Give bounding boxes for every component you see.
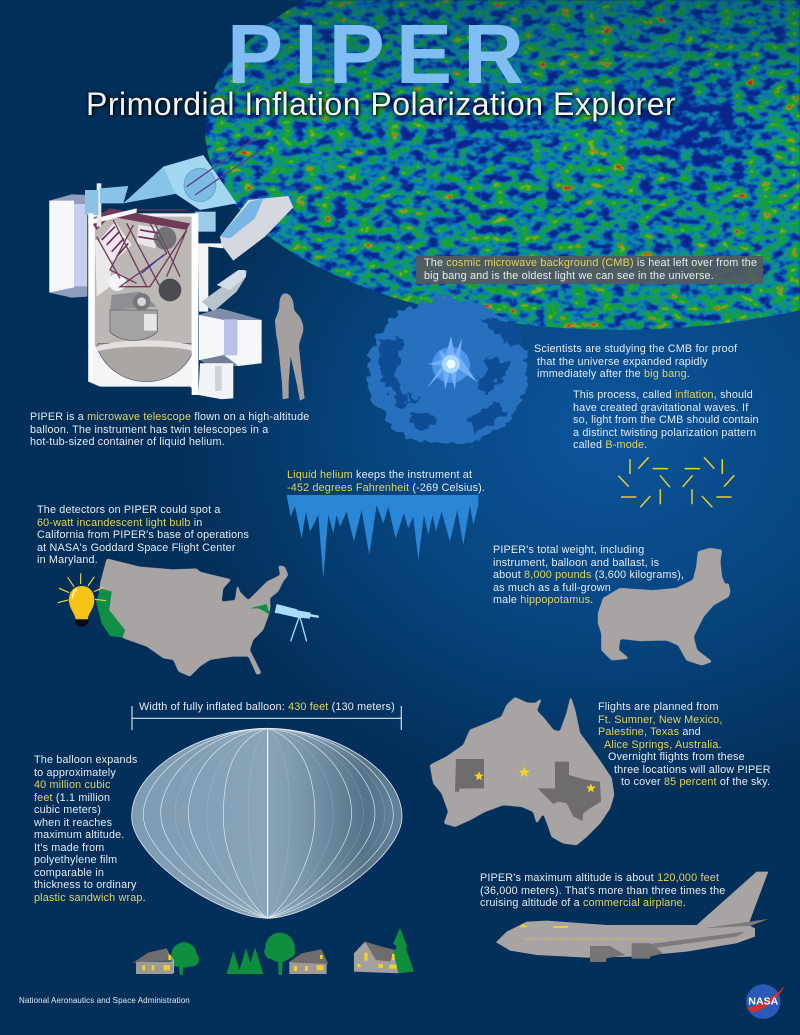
inflation burst [368,298,528,446]
NASA logo: NASA [748,996,778,1007]
subtitle: Primordial Inflation Polarization Explorer [86,86,676,122]
text: CMB definition [424,257,757,282]
text: detectors: at NASA's Goddard Space Flight Center [37,542,236,554]
text: PIPER description: PIPER is a microwave telescope flown on a high-altitude [30,411,309,423]
text: flights: Ft. Sumner, New Mexico, [598,714,723,726]
text: liquid helium: Liquid helium keeps the instrument at [287,469,472,481]
text: balloon volume: The balloon expands [34,754,137,766]
text: altitude: (36,000 meters). That's more than three times the [480,885,725,897]
footer: National Aeronautics and Space Administration [19,996,190,1005]
text: PIPER description: hot-tub-sized container of liquid helium. [30,436,225,448]
text: inflation: This process, called inflation, should [573,389,753,401]
text: liquid helium [287,469,485,494]
text: CMB definition: big bang and is the oldest light we can see in the universe. [424,270,714,282]
Maryland [250,604,270,615]
text: balloon volume: to approximately [34,767,116,779]
text: flights: Overnight flights from these [608,751,745,763]
text: weight: about 8,000 pounds (3,600 kilograms), [493,569,684,581]
text: flights: Flights are planned from [598,701,719,713]
text: inflation: so, light from the CMB should contain [573,414,759,426]
text: balloon volume: It's made from [34,842,104,854]
text: altitude [480,872,725,909]
text: flights [598,701,771,788]
Texas [538,762,601,821]
text: flights: three locations will allow PIPER [614,764,771,776]
title: PIPER [227,7,535,101]
text: balloon volume: 40 million cubic [34,779,111,791]
airplane [496,872,768,962]
California [96,588,125,638]
text: scientists [534,343,738,380]
text: flights: Palestine, Texas and [598,726,701,738]
text: balloon volume: thickness to ordinary [34,879,137,891]
houses and trees [132,928,414,975]
text: balloon volume: comparable in [34,867,104,879]
text: balloon volume: plastic sandwich wrap. [34,892,146,904]
text: inflation [573,389,759,451]
text: balloon volume: polyethylene film [34,854,117,866]
Australia map with state overlays [430,697,614,845]
person silhouette [275,293,305,401]
text: PIPER description: balloon. The instrument has twin telescopes in a [30,424,268,436]
text: detectors: The detectors on PIPER could spot a [37,504,221,516]
text: flights: to cover 85 percent of the sky. [621,776,770,788]
text: balloon volume: cubic meters) [34,804,101,816]
text: balloon width: Width of fully inflated balloon: 430 feet (130 meters) [139,701,395,713]
text: weight: as much as a full-grown [493,582,611,594]
text: altitude: PIPER's maximum altitude is about 120,000 feet [480,872,719,884]
text: detectors: in Maryland. [37,554,98,566]
balloon [132,728,402,918]
text: detectors [37,504,249,566]
text: CMB definition: The cosmic microwave background (CMB) is heat left over from the [424,257,757,269]
text: inflation: called B-mode. [573,439,647,451]
text: balloon volume: maximum altitude. [34,829,124,841]
CMB caption box [416,256,763,284]
hippopotamus [598,548,730,665]
text: balloon volume: when it reaches [34,817,112,829]
text: inflation: a distinct twisting polarization pattern [573,427,756,439]
text: PIPER description [30,411,309,448]
text: flights: Alice Springs, Australia. [604,739,722,751]
text: weight: instrument, balloon and ballast, is [493,557,659,569]
icicles [287,495,478,578]
text: balloon volume: feet (1.1 million [34,792,110,804]
text: scientists: Scientists are studying the CMB for proof [534,343,737,355]
light bulb [58,573,106,627]
New Mexico [455,759,484,792]
NASA logo [746,984,785,1019]
text: balloon volume [34,754,146,904]
CMB sphere map [205,0,800,332]
text: detectors: California from PIPER's base of operations [37,529,249,541]
PIPER instrument [49,137,293,399]
text: altitude: cruising altitude of a commercial airplane. [480,897,686,909]
text: weight [493,544,684,606]
text: inflation: have created gravitational waves. If [573,402,748,414]
small telescope [275,604,319,641]
text: liquid helium: -452 degrees Fahrenheit (-269 Celsius). [287,482,485,494]
USA map [96,558,288,677]
text: detectors: 60-watt incandescent light bulb in [37,517,202,529]
text: weight: male hippopotamus. [493,594,593,606]
balloon width bracket [132,706,401,730]
text: weight: PIPER's total weight, including [493,544,644,556]
text: scientists: that the universe expanded rapidly [537,356,708,368]
yellow B-mode lines [618,457,734,507]
text: scientists: immediately after the big bang. [537,368,690,380]
